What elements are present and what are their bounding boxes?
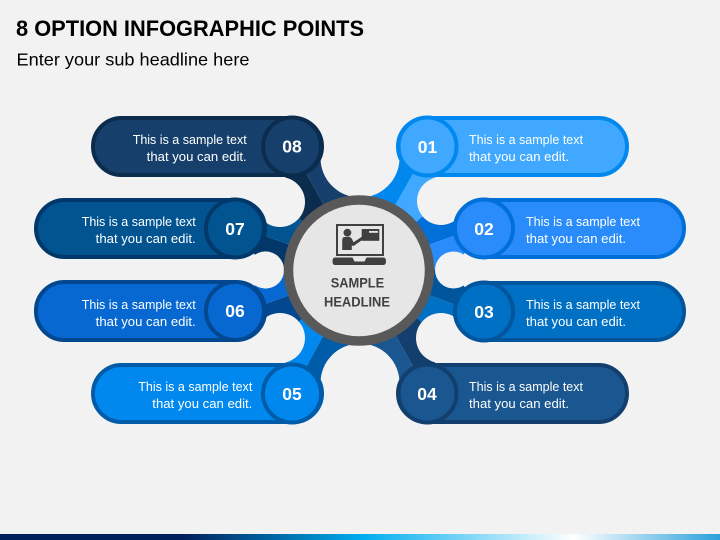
option 08: This is a sample text: [133, 132, 247, 147]
option 06: This is a sample text: [82, 297, 196, 312]
option 04: that you can edit.: [469, 396, 569, 411]
option 06: 06: [225, 301, 245, 321]
option 03: This is a sample text: [526, 297, 640, 312]
center headline: [324, 274, 390, 310]
center headline: HEADLINE: [324, 294, 390, 310]
center headline: SAMPLE: [331, 274, 384, 290]
option 06: that you can edit.: [96, 314, 196, 329]
connector hub with eight two-tone arms: [200, 118, 518, 422]
option 05: 05: [282, 384, 302, 404]
subtitle: Enter your sub headline here: [16, 50, 250, 70]
option 03: [455, 282, 684, 340]
option 02: This is a sample text: [526, 214, 640, 229]
option 08: that you can edit.: [147, 149, 247, 164]
option 03: that you can edit.: [526, 314, 626, 329]
option 05: that you can edit.: [152, 396, 252, 411]
option 07: 07: [225, 219, 245, 239]
option 01: This is a sample text: [469, 132, 583, 147]
title: 8 OPTION INFOGRAPHIC POINTS: [16, 16, 364, 41]
option 02: [455, 200, 684, 258]
option 02: that you can edit.: [526, 231, 626, 246]
option 07: [36, 200, 265, 258]
option 07: This is a sample text: [82, 214, 196, 229]
option 07: that you can edit.: [96, 231, 196, 246]
option 08: 08: [282, 136, 302, 156]
option 04: [398, 364, 627, 422]
option 01: 01: [418, 137, 437, 157]
option 05: [93, 364, 322, 422]
icon: presenter at laptop: [332, 225, 386, 265]
option 02: 02: [474, 219, 494, 239]
option 04: 04: [417, 384, 437, 404]
option 04: This is a sample text: [469, 379, 583, 394]
central circle: [288, 200, 430, 341]
option 01: that you can edit.: [469, 149, 569, 164]
option 01: [398, 118, 627, 176]
option 05: This is a sample text: [138, 379, 253, 394]
option 03: 03: [474, 302, 494, 322]
footer gradient bar: [0, 534, 720, 540]
option 08: [93, 118, 322, 176]
option 06: [36, 282, 265, 340]
